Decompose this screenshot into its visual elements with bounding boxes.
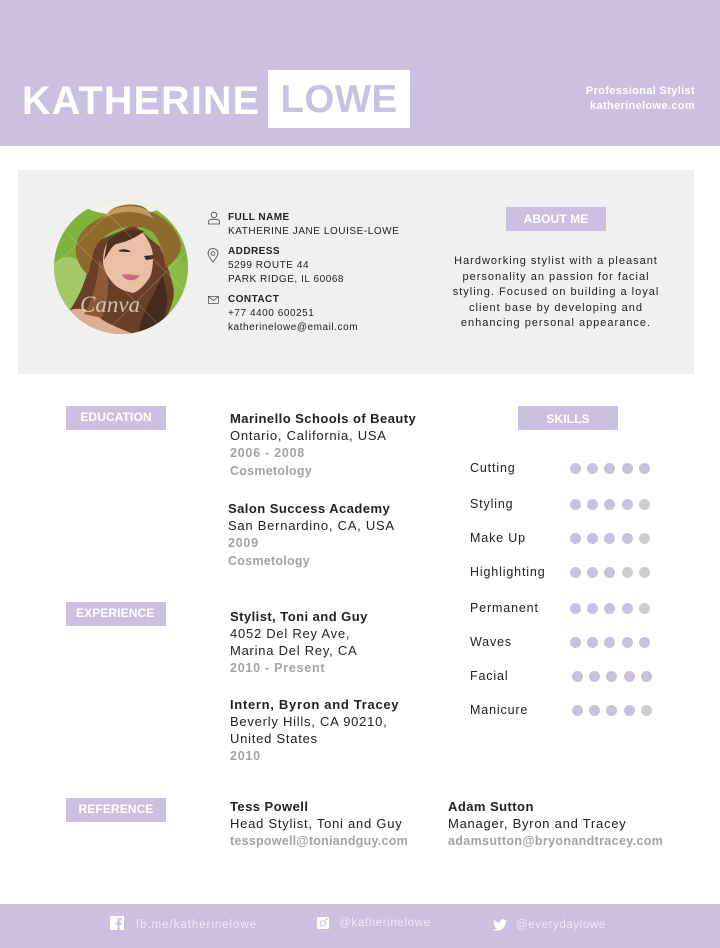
- icon: instagram: [317, 917, 329, 929]
- experience entry 1: [230, 609, 368, 675]
- job title and website: [586, 85, 695, 112]
- experience heading: [66, 602, 166, 626]
- education entry 2: 2009: [228, 536, 259, 550]
- instagram handle: @katherinelowe: [339, 917, 431, 929]
- about me heading: [506, 207, 606, 231]
- skill: cutting: Cutting: [470, 461, 516, 475]
- portrait photo: Canva: [80, 292, 140, 317]
- icon: envelope: [208, 296, 219, 304]
- portrait photo: [54, 200, 188, 334]
- skill: waves: Waves: [470, 635, 512, 649]
- reference 1: Tess Powell: [230, 799, 308, 814]
- education heading: EDUCATION: [80, 410, 152, 424]
- last name box: LOWE: [280, 78, 398, 121]
- education entry 1: Ontario, California, USA: [230, 428, 387, 443]
- skills heading: [518, 406, 618, 430]
- education entry 2: Salon Success Academy: [228, 501, 390, 516]
- experience entry 2: United States: [230, 731, 318, 746]
- footer band: [0, 904, 720, 948]
- rating: manicure: [572, 705, 652, 716]
- skill: manicure: Manicure: [470, 703, 528, 717]
- reference 2: Manager, Byron and Tracey: [448, 816, 626, 831]
- rating: styling: [570, 499, 650, 510]
- job title and website: katherinelowe.com: [590, 100, 695, 112]
- full name block: [228, 212, 399, 237]
- skills heading: SKILLS: [546, 412, 590, 426]
- twitter handle: @everydaylowe: [516, 919, 606, 931]
- education heading: [66, 406, 166, 430]
- icon: person: [208, 212, 220, 224]
- contact block: +77 4400 600251: [228, 308, 314, 319]
- experience heading: EXPERIENCE: [76, 606, 154, 620]
- rating: facial: [572, 671, 652, 682]
- education entry 2: Cosmetology: [228, 554, 310, 568]
- education entry 2: San Bernardino, CA, USA: [228, 518, 395, 533]
- reference 1: [230, 799, 408, 848]
- full name block: FULL NAME: [228, 212, 290, 223]
- experience entry 2: Beverly Hills, CA 90210,: [230, 714, 387, 729]
- last name box: [268, 70, 410, 128]
- skill: facial: Facial: [470, 669, 508, 683]
- education entry 1: 2006 - 2008: [230, 446, 305, 460]
- address block: PARK RIDGE, IL 60068: [228, 274, 344, 285]
- experience entry 1: 2010 - Present: [230, 661, 325, 675]
- contact block: CONTACT: [228, 294, 279, 305]
- experience entry 2: Intern, Byron and Tracey: [230, 697, 399, 712]
- reference 1: Head Stylist, Toni and Guy: [230, 816, 402, 831]
- rating: highlighting: [570, 567, 650, 578]
- skill: styling: Styling: [470, 497, 513, 511]
- address block: 5299 ROUTE 44: [228, 260, 309, 271]
- reference 2: [448, 799, 663, 848]
- reference 1: tesspowell@toniandguy.com: [230, 834, 408, 848]
- first name: KATHERINE: [22, 79, 260, 123]
- skill: highlighting: Highlighting: [470, 565, 546, 579]
- about me text: Hardworking stylist with a pleasant: [454, 255, 658, 267]
- rating: cutting: [570, 463, 650, 474]
- rating: make up: [570, 533, 650, 544]
- reference 2: Adam Sutton: [448, 799, 534, 814]
- experience entry 1: Stylist, Toni and Guy: [230, 609, 368, 624]
- reference heading: REFERENCE: [79, 802, 153, 816]
- about me text: styling. Focused on building a loyal: [453, 286, 659, 298]
- rating: permanent: [570, 603, 650, 614]
- reference heading: [66, 798, 166, 822]
- icon: twitter: [493, 919, 507, 931]
- experience entry 1: 4052 Del Rey Ave,: [230, 626, 350, 641]
- address block: [228, 246, 344, 285]
- experience entry 2: 2010: [230, 749, 261, 763]
- about me text: client base by developing and: [469, 302, 643, 314]
- rating: waves: [570, 637, 650, 648]
- reference 2: adamsutton@bryonandtracey.com: [448, 834, 663, 848]
- icon: location pin: [208, 248, 218, 262]
- address block: ADDRESS: [228, 246, 280, 257]
- icon: facebook: [110, 916, 124, 930]
- education entry 1: [230, 411, 416, 478]
- education entry 2: [228, 501, 395, 568]
- experience entry 2: [230, 697, 399, 763]
- about me text: personality an passion for facial: [462, 271, 650, 283]
- about me text: enhancing personal appearance.: [461, 317, 651, 329]
- about me heading: ABOUT ME: [524, 212, 588, 226]
- skill: permanent: Permanent: [470, 601, 539, 615]
- facebook handle: fb.me/katherinelowe: [136, 919, 257, 931]
- education entry 1: Cosmetology: [230, 464, 312, 478]
- experience entry 1: Marina Del Rey, CA: [230, 643, 357, 658]
- contact block: katherinelowe@email.com: [228, 322, 358, 333]
- job title and website: Professional Stylist: [586, 85, 695, 97]
- header band: [0, 0, 720, 146]
- full name block: KATHERINE JANE LOUISE-LOWE: [228, 226, 399, 237]
- profile panel: [18, 170, 694, 374]
- skill: make up: Make Up: [470, 531, 526, 545]
- contact block: [228, 294, 358, 333]
- about me text: [453, 255, 659, 329]
- education entry 1: Marinello Schools of Beauty: [230, 411, 416, 426]
